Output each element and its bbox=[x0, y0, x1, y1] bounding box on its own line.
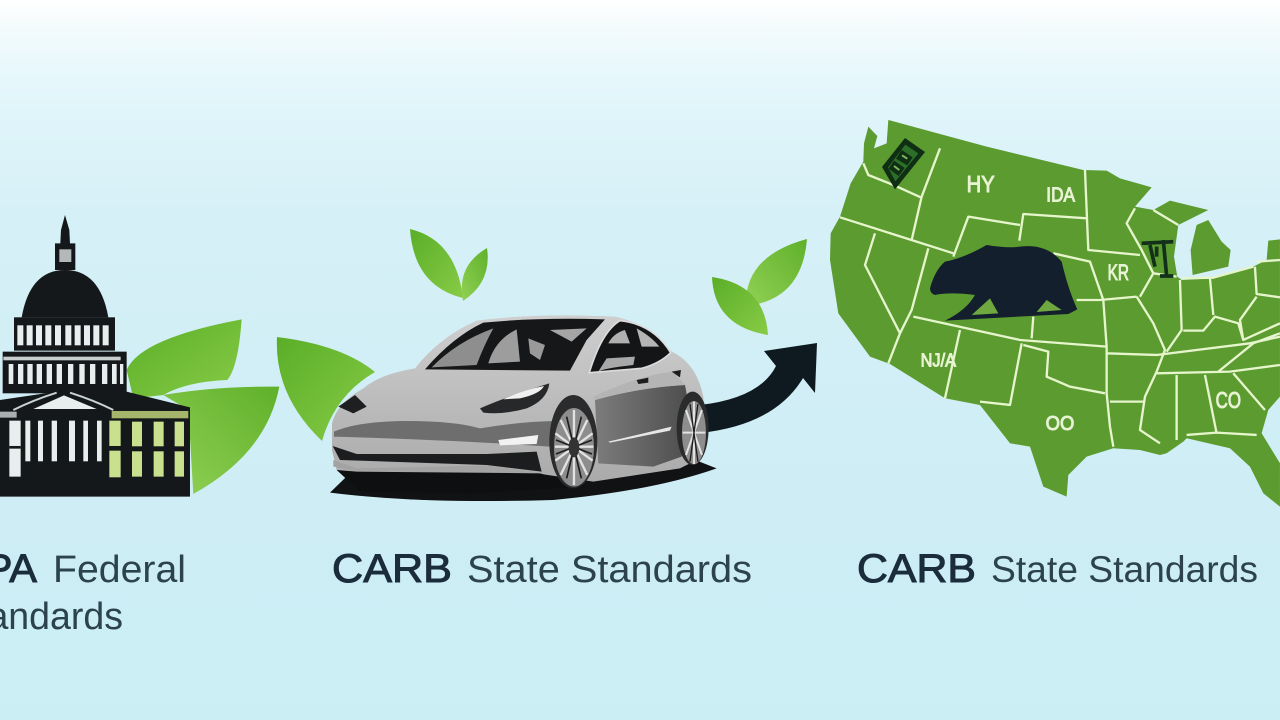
icon: car bbox=[330, 315, 717, 501]
icon: bear bbox=[930, 245, 1077, 321]
icon: capitol building bbox=[0, 215, 190, 497]
map land bbox=[830, 120, 1280, 507]
icon: leaf beside car bbox=[277, 337, 375, 441]
door trim bbox=[608, 427, 672, 443]
icon: banknote bbox=[882, 138, 925, 189]
grille bbox=[333, 421, 587, 493]
text: CARB State Standards label, right: State Standards bbox=[991, 549, 1258, 590]
text: CARB State Standards label, right: CARB bbox=[857, 547, 976, 591]
map labels: CO bbox=[1216, 387, 1241, 413]
icon: leaves beside arrow bbox=[712, 239, 807, 335]
icon: capitol leaves bbox=[127, 319, 279, 494]
text: EPA Federal Standards label: Federal bbox=[53, 549, 186, 591]
door handles bbox=[637, 370, 681, 384]
icon: leaves above car bbox=[410, 229, 488, 301]
map labels bbox=[921, 171, 1241, 435]
headlights bbox=[338, 383, 549, 413]
text: CARB State Standards label, centre: State Standards bbox=[467, 549, 752, 591]
map: United States bbox=[830, 120, 1280, 507]
front wheel bbox=[549, 395, 597, 488]
text: EPA Federal Standards label bbox=[0, 547, 186, 638]
arrow bbox=[700, 343, 817, 433]
text: CARB State Standards label, centre bbox=[332, 547, 752, 591]
map labels: NJ/A bbox=[921, 350, 956, 371]
side windows bbox=[589, 321, 671, 373]
map labels: OO bbox=[1046, 412, 1074, 435]
side panel bbox=[595, 385, 688, 467]
map labels: IDA bbox=[1046, 185, 1076, 207]
windshield bbox=[425, 319, 605, 371]
state borders bbox=[840, 148, 1280, 447]
map: Michigan bbox=[1191, 220, 1231, 275]
map labels: KR bbox=[1108, 260, 1129, 285]
icon: tower mark bbox=[1142, 240, 1173, 276]
text: CARB State Standards label, centre: CARB bbox=[332, 547, 452, 591]
text: CARB State Standards label, right bbox=[857, 547, 1258, 591]
car shadow bbox=[330, 457, 717, 501]
rear wheel bbox=[677, 392, 709, 465]
map labels: HY bbox=[967, 171, 995, 197]
car body bbox=[332, 315, 704, 487]
